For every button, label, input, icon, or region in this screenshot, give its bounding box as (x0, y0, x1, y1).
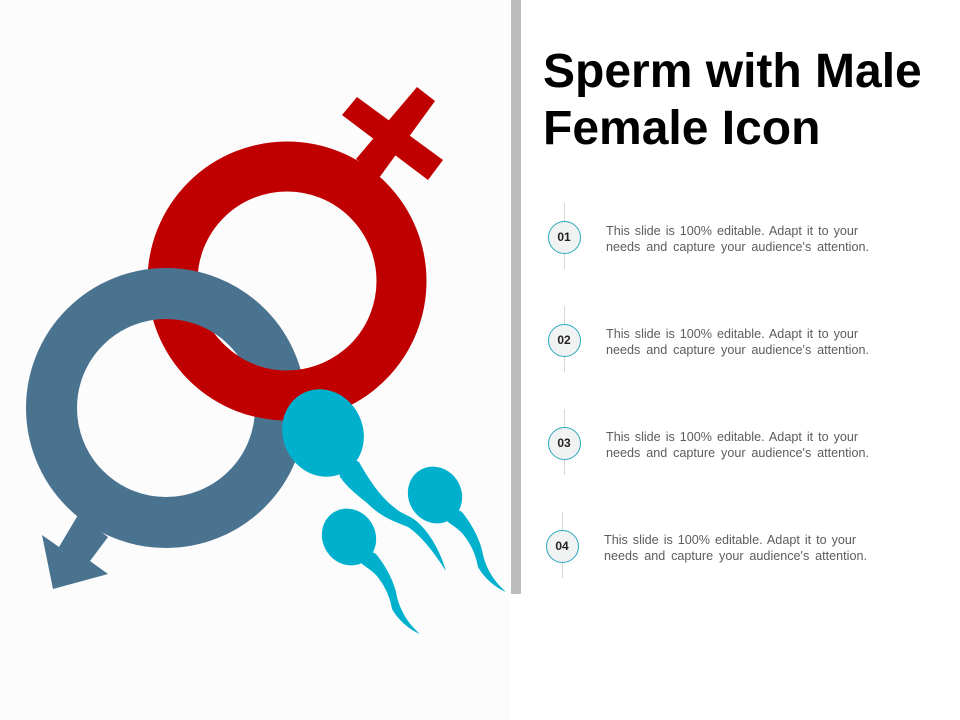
icon: small sperm right (398, 457, 506, 592)
connector line 01 (564, 203, 565, 269)
number badge 04: 04 (555, 539, 569, 553)
text block 04 (604, 533, 867, 563)
text block 03: needs and capture your audience's attention. (606, 446, 869, 460)
text block 02: needs and capture your audience's attention. (606, 343, 869, 357)
number badge 01 (548, 221, 581, 254)
title (543, 45, 922, 155)
item 03 (548, 409, 869, 475)
title: Sperm with Male (543, 45, 922, 98)
number badge 01: 01 (557, 230, 571, 244)
icon: male symbol (42, 294, 280, 589)
left background panel (0, 0, 510, 720)
connector line 03 (564, 409, 565, 475)
text block 01: needs and capture your audience's attention. (606, 240, 869, 254)
icon: female symbol (172, 87, 443, 396)
text block 02 (606, 327, 869, 357)
red ring overlap in front of male ring (199, 355, 361, 395)
vertical grey divider (511, 0, 521, 594)
text block 03: This slide is 100% editable. Adapt it to your (606, 430, 858, 444)
icon: large sperm (268, 376, 446, 571)
text block 04: This slide is 100% editable. Adapt it to your (604, 533, 856, 547)
title: Female Icon (543, 102, 820, 155)
gender symbols and sperm illustration (26, 87, 506, 634)
item 02 (548, 306, 869, 372)
text block 04: needs and capture your audience's attention. (604, 549, 867, 563)
connector line 02 (564, 306, 565, 372)
number badge 02: 02 (557, 333, 571, 347)
text block 03 (606, 430, 869, 460)
text block 01: This slide is 100% editable. Adapt it to your (606, 224, 858, 238)
connector line 04 (562, 512, 563, 578)
item 04 (546, 512, 867, 578)
number badge 03 (548, 427, 581, 460)
icon: small sperm left (312, 499, 420, 634)
item 01 (548, 203, 869, 269)
number badge 02 (548, 324, 581, 357)
number badge 03: 03 (557, 436, 571, 450)
text block 02: This slide is 100% editable. Adapt it to your (606, 327, 858, 341)
text block 01 (606, 224, 869, 254)
number badge 04 (546, 530, 579, 563)
